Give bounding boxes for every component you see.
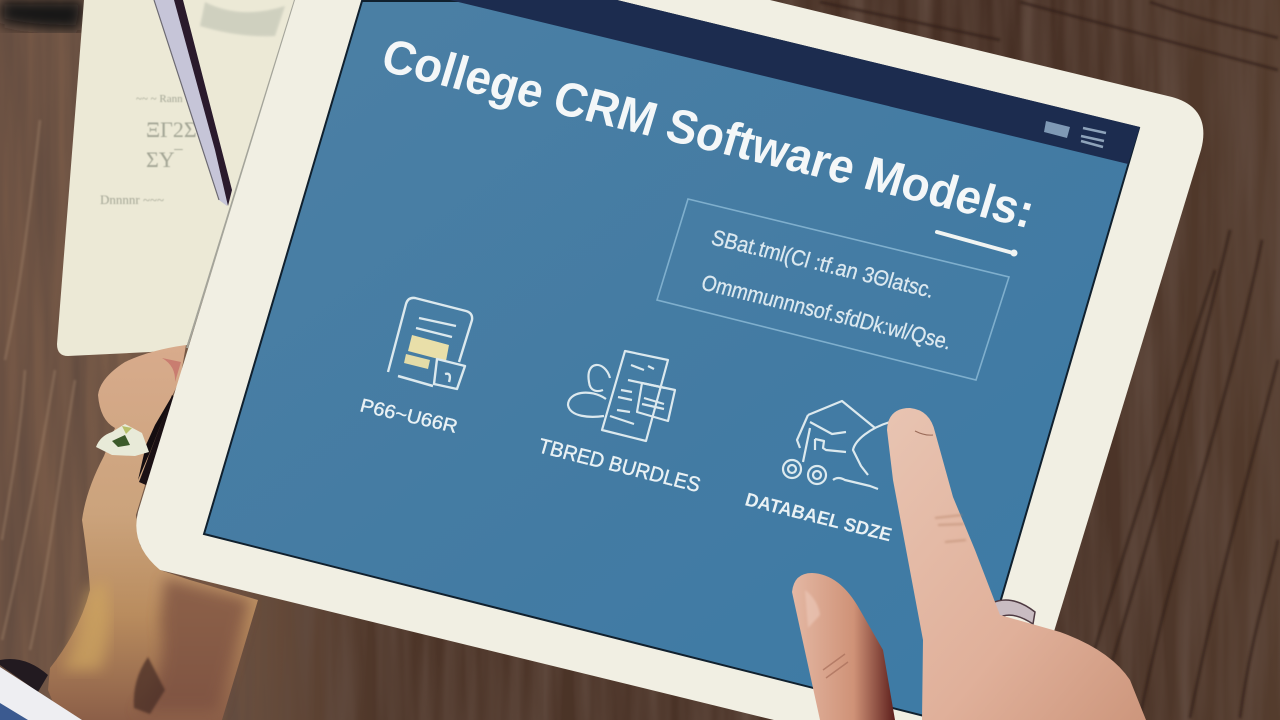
tablet screen — [204, 1, 1139, 719]
menu icon in top bar — [1081, 128, 1106, 147]
ring on right hand — [992, 600, 1035, 624]
description box — [657, 199, 1009, 380]
note scribbles: Dnnnnr ~~~ — [100, 192, 164, 207]
label: database size: DATABAEL SDZE — [743, 490, 894, 546]
paper note — [57, 0, 296, 356]
left hand — [48, 345, 258, 720]
dark top-left corner shadow — [0, 0, 85, 30]
note scribbles: ΣΥ‾ — [146, 147, 183, 172]
flower ring — [96, 424, 149, 456]
fingernail — [162, 358, 181, 382]
box line 2: Ommmunnnsof.sfdDk:wl/Qse. — [699, 270, 955, 354]
icon: document — [388, 298, 472, 389]
icon: person with phone and book — [568, 351, 675, 441]
window icon in top bar — [1044, 121, 1070, 138]
dark gap between finger and tablet — [139, 395, 178, 485]
title underline — [937, 232, 1018, 256]
right hand with pointing finger — [792, 408, 1146, 720]
knuckle creases — [935, 515, 966, 542]
navy top bar — [450, 0, 1140, 164]
icon: database sketch — [783, 401, 890, 489]
sleeve at bottom left — [0, 659, 82, 720]
nail line on finger — [915, 431, 933, 435]
note scribbles: ΞΓ2Σ — [146, 117, 197, 142]
box line 1: SBat.tml(Cl :tf.an 3Θlatsc. — [709, 225, 937, 303]
thumb — [792, 573, 895, 720]
note scribbles — [100, 93, 197, 207]
tablet shadow line — [187, 0, 295, 348]
palm shadow — [135, 578, 250, 712]
title: College CRM Software Models: — [376, 29, 1041, 239]
note scribbles: ~~ ~ Rann — [136, 93, 183, 105]
label: tiered bundles: TBRED BURDLES — [536, 435, 703, 497]
yellow glow on wrist — [62, 580, 109, 670]
pen — [154, 0, 232, 206]
label: per-user: P66~U66R — [358, 396, 460, 438]
thumb fold — [134, 657, 165, 714]
